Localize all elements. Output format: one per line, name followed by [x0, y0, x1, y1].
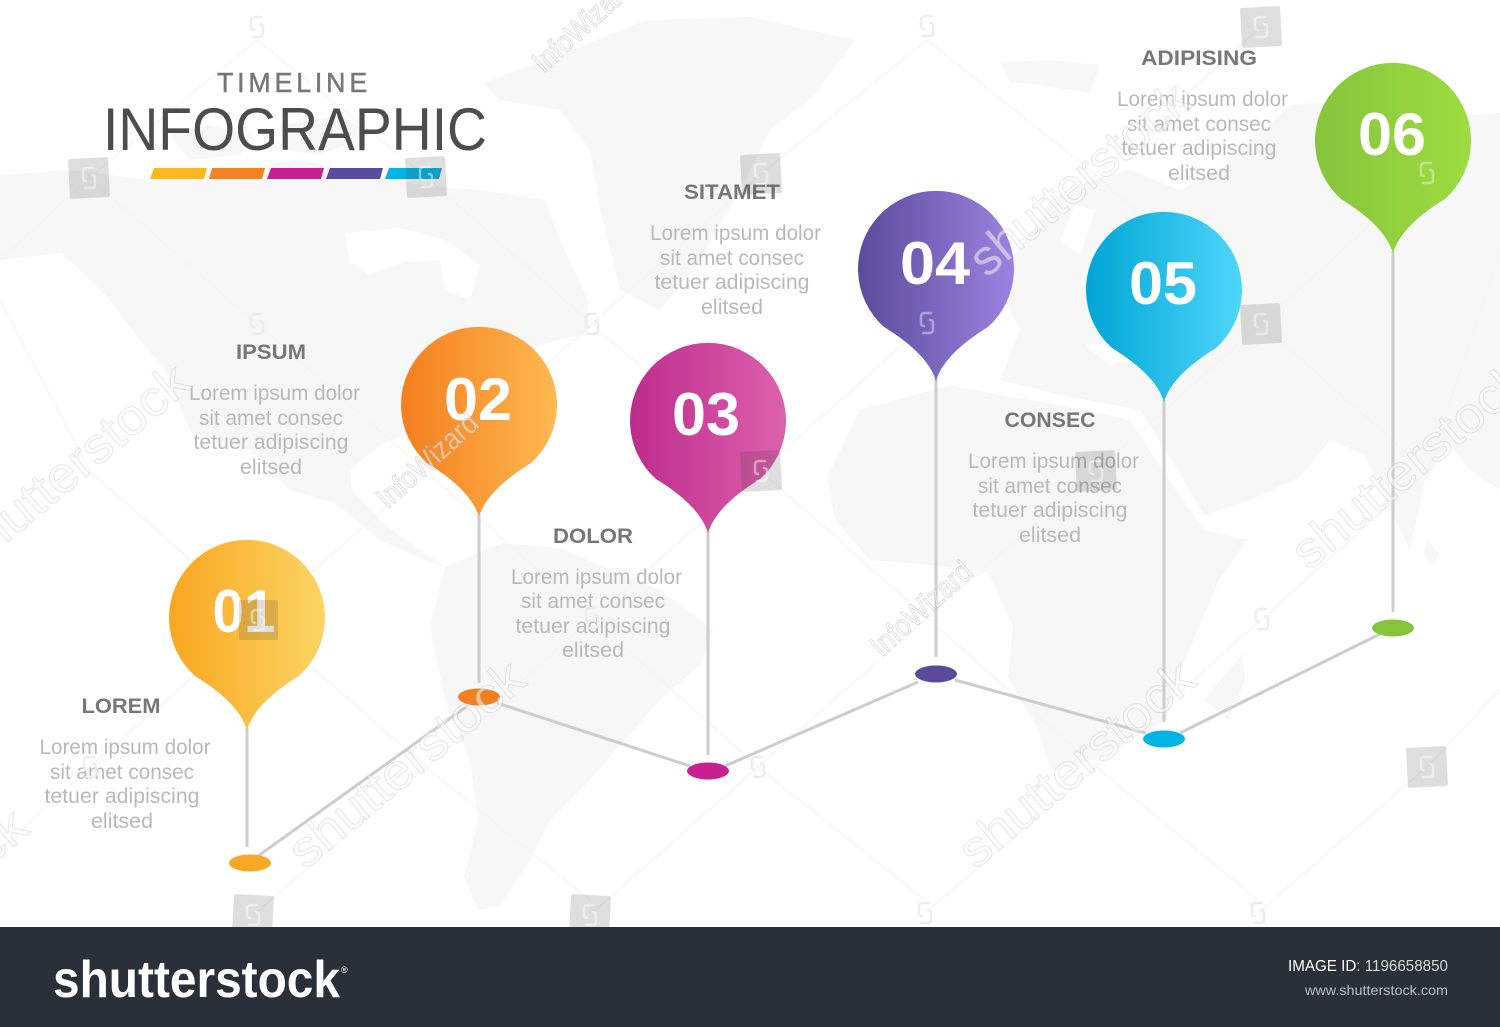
- pin 01: [169, 540, 325, 730]
- base dot 03: [687, 762, 729, 780]
- base dot 02: [458, 688, 500, 706]
- number 04: 04: [900, 230, 971, 297]
- watermark text: InfoWizard: [370, 407, 485, 515]
- body: dolor: Lorem ipsum dolor: [511, 566, 682, 589]
- body: ipsum: Lorem ipsum dolor: [189, 382, 360, 405]
- footer logo: shutterstock: [53, 951, 340, 1009]
- pole 05: [1162, 400, 1166, 722]
- heading: lorem: LOREM: [82, 695, 160, 718]
- heading: ipsum: IPSUM: [236, 341, 306, 364]
- title line: INFOGRAPHIC: INFOGRAPHIC: [103, 96, 487, 163]
- body: ipsum: elitsed: [240, 456, 302, 479]
- watermark small marks: [84, 16, 1433, 923]
- pole 06: [1392, 251, 1394, 612]
- timeline connector lines: [258, 634, 1380, 856]
- title: timeline infographic: [103, 67, 487, 163]
- pin 02: [401, 327, 557, 517]
- body: sitamet: tetuer adipiscing: [654, 271, 810, 294]
- body: consec: elitsed: [1019, 524, 1081, 547]
- step 05: [1086, 212, 1242, 748]
- body: lorem: sit amet consec: [50, 761, 194, 784]
- pole 01: [246, 728, 248, 847]
- pole 03: [706, 531, 710, 755]
- text block: adipising: [1117, 47, 1288, 185]
- body: sitamet: sit amet consec: [660, 247, 804, 270]
- registered mark: ®: [341, 965, 348, 975]
- website: www.shutterstock.com: [1304, 982, 1448, 998]
- footer bar: [0, 927, 1500, 1027]
- pin 03: [630, 343, 786, 533]
- pole 04: [934, 379, 938, 657]
- number 05: 05: [1129, 250, 1197, 317]
- body: adipising: elitsed: [1168, 162, 1230, 185]
- step 06: [1315, 63, 1471, 636]
- body: dolor: tetuer adipiscing: [516, 615, 670, 638]
- text block: lorem: [40, 695, 211, 833]
- base dot 04: [915, 666, 957, 682]
- text block: sitamet: [650, 181, 821, 319]
- heading: dolor: DOLOR: [553, 525, 633, 548]
- body: adipising: sit amet consec: [1127, 113, 1271, 136]
- step 02: [401, 327, 557, 706]
- pole 02: [478, 515, 480, 683]
- image id: IMAGE ID: 1196658850: [1288, 958, 1448, 975]
- title colour bars: [150, 168, 442, 179]
- watermark text: shutterstock: [958, 70, 1201, 287]
- pin 06: [1315, 63, 1471, 253]
- base dot 01: [229, 854, 271, 872]
- body: consec: sit amet consec: [978, 475, 1122, 498]
- body: consec: Lorem ipsum dolor: [968, 450, 1139, 473]
- body: lorem: Lorem ipsum dolor: [40, 736, 211, 759]
- heading: sitamet: SITAMET: [684, 181, 780, 204]
- body: adipising: tetuer adipiscing: [1122, 137, 1276, 160]
- number 01: 01: [212, 578, 276, 645]
- body: adipising: Lorem ipsum dolor: [1117, 88, 1288, 111]
- number 02: 02: [444, 366, 512, 433]
- step 01: [169, 540, 325, 872]
- text block: ipsum: [189, 341, 360, 479]
- pin 05: [1086, 212, 1242, 402]
- base dot 05: [1143, 730, 1185, 748]
- text block: consec: [968, 409, 1139, 547]
- watermark text: shutterstock: [277, 649, 536, 879]
- pin 04: [858, 191, 1014, 381]
- body: ipsum: sit amet consec: [199, 407, 343, 430]
- body: lorem: tetuer adipiscing: [44, 785, 200, 808]
- title line: TIMELINE: TIMELINE: [217, 67, 371, 98]
- watermark text: InfoWizard: [864, 555, 979, 663]
- body: dolor: [511, 566, 682, 662]
- body: lorem: [40, 736, 211, 833]
- body: dolor: sit amet consec: [521, 590, 665, 613]
- text block: dolor: [511, 525, 682, 662]
- body: ipsum: tetuer adipiscing: [194, 431, 348, 454]
- heading: consec: CONSEC: [1004, 409, 1096, 432]
- body: lorem: elitsed: [91, 810, 153, 833]
- body: dolor: elitsed: [562, 639, 624, 662]
- heading: adipising: ADIPISING: [1141, 47, 1257, 70]
- base dot 06: [1372, 620, 1414, 636]
- watermark text: shutterstock: [947, 649, 1206, 879]
- step 04: [858, 191, 1014, 682]
- body: consec: [968, 450, 1139, 547]
- body: sitamet: Lorem ipsum dolor: [650, 222, 821, 245]
- body: consec: tetuer adipiscing: [972, 499, 1128, 522]
- number 06: 06: [1358, 101, 1426, 168]
- body: adipising: [1117, 88, 1288, 185]
- number 03: 03: [672, 381, 740, 448]
- body: sitamet: [650, 222, 821, 319]
- body: ipsum: [189, 382, 360, 479]
- step 03: [630, 343, 786, 780]
- body: sitamet: elitsed: [701, 296, 763, 319]
